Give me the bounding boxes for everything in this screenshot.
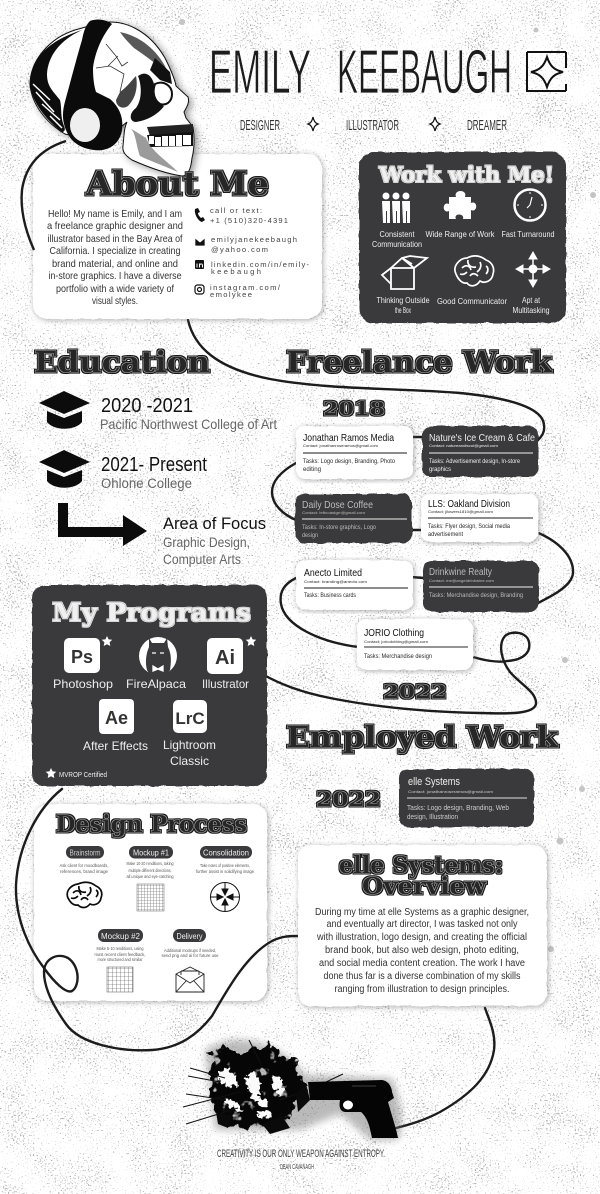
icon labels: Thinking Outside [376, 296, 430, 305]
program labels: Illustrator [202, 677, 249, 691]
icon labels: Apt at [522, 296, 541, 305]
icon: people [382, 192, 410, 223]
card: Nature's Ice Cream & Cafe: Tasks: Advertisement design, In-store [429, 458, 520, 465]
step: mockup 2: Mockup #2 [101, 931, 140, 941]
icon labels: Consistent [380, 230, 415, 239]
icon: FireAlpaca [139, 637, 177, 675]
icon: title diamond box [527, 52, 566, 91]
text block: about me bio: Hello! My name is Emily, and I am [48, 209, 182, 220]
text block: about me bio [47, 209, 183, 307]
card: Daily Dose Coffee: design [302, 532, 318, 539]
icon labels: Fast Turnaround [502, 230, 554, 239]
icon labels: Wide Range of Work [426, 230, 495, 239]
card: Drinkwine Realty: Tasks: Merchandise design, Branding [429, 592, 523, 599]
card: elle Systems [399, 769, 534, 827]
year 2022 employed: 2022 [316, 787, 381, 811]
area of focus [163, 514, 266, 567]
step: brainstorm: Brainstorm [70, 848, 100, 858]
education entry 1 [100, 395, 277, 432]
card: Nature's Ice Cream & Cafe [422, 426, 538, 477]
connector line: headphones to card [22, 141, 66, 250]
icon: Illustrator: Ai [215, 647, 235, 669]
step: mockup 2: Make 5-10 renditions, using [96, 946, 144, 951]
title: Emily Keebaugh: EMILY [209, 38, 311, 107]
heading: Work with Me: Work with Me! [378, 162, 554, 187]
education entry 2: 2021- Present [101, 454, 207, 476]
panel: elle systems overview [298, 845, 547, 1006]
panel: work with me [359, 152, 566, 323]
card: Drinkwine Realty [423, 561, 539, 612]
card: JORIO Clothing: Tasks: Merchandise design [364, 653, 432, 660]
step: consolidation: Take notes of positive elements, [200, 863, 250, 868]
text block: overview body: and social media content creation. The work I have [319, 958, 525, 969]
contact details: emilyjanekeebaugh [211, 235, 297, 244]
text block: overview body: During my time at elle Systems as a graphic designer, [315, 907, 529, 918]
illustration: gun with splatter [183, 1040, 401, 1140]
text block: about me bio: illustrator based in the Bay Area of [48, 234, 183, 245]
legend: MVROP certified [46, 768, 107, 779]
design process contents [56, 811, 254, 992]
icon: star [102, 636, 112, 646]
step: brainstorm: Ask client for moodboards, [60, 863, 108, 868]
year 2022: 2022 [383, 681, 447, 703]
card: Jonathan Ramos Media: Tasks: Logo design, Branding, Photo [303, 458, 395, 465]
step: delivery: Additional mockups if needed, [164, 948, 216, 953]
quote [217, 1148, 385, 1171]
card: Daily Dose Coffee: Daily Dose Coffee [302, 499, 373, 511]
card: LLS Oakland Division: LLS: Oakland Division [428, 498, 510, 510]
icon: sparkle [430, 117, 440, 131]
icon: After Effects: Ae [105, 708, 128, 728]
card: Jonathan Ramos Media: editing [303, 466, 321, 473]
contact details: instagram.com/ [210, 283, 281, 292]
step: mockup 2: most recent client feedback, [94, 952, 146, 957]
illustration: skull with headphones [30, 20, 197, 178]
step: mockup 1: all unique and eye-catching [126, 874, 174, 879]
heading: elle Systems Overview: elle Systems: [339, 852, 503, 879]
card: Drinkwine Realty: Drinkwine Realty [429, 566, 493, 578]
step: mockup 1: Make 10-20 renditions, taking [126, 861, 174, 866]
step: mockup 2: more structured and similar [98, 957, 143, 962]
employed work heading: Employed Work [286, 720, 559, 754]
card: Nature's Ice Cream & Cafe: graphics [429, 466, 452, 473]
heading: elle Systems Overview: Overview [362, 873, 487, 900]
contact details: linkedin.com/in/emily- [211, 260, 309, 269]
connector line: upper, behind cards [188, 320, 573, 713]
contact details [195, 206, 309, 299]
icon: instagram [195, 285, 204, 294]
program labels: FireAlpaca [126, 677, 186, 691]
step: consolidation [196, 846, 254, 912]
card: Jonathan Ramos Media: Jonathan Ramos Media [303, 432, 394, 444]
step: delivery: Delivery [176, 931, 203, 941]
card: LLS Oakland Division [421, 494, 538, 542]
program labels: Photoshop [53, 677, 113, 691]
text block: about me bio: portfolio with a wide variety of [56, 284, 174, 295]
icon labels: the Box [395, 306, 411, 315]
contact details: emolykee [210, 290, 252, 299]
panel: about me card [33, 154, 322, 319]
card: Anecto Limited: Contact: branding@anecto.com [304, 580, 367, 584]
panel: my programs [32, 585, 267, 786]
icon labels [372, 230, 554, 315]
card: Drinkwine Realty: Contact: me@angeldrinkwine.com [429, 579, 494, 583]
step: brainstorm: references, brand image [60, 869, 108, 874]
card: LLS Oakland Division: Tasks: Flyer design, Social media [428, 523, 510, 530]
card: JORIO Clothing: JORIO Clothing [364, 627, 424, 639]
icon: linkedin [195, 260, 204, 269]
icon: brain [455, 256, 494, 286]
program labels: After Effects [83, 739, 148, 753]
card: Daily Dose Coffee: Tasks: In-store graphics, Logo [302, 524, 376, 531]
icon: email [195, 238, 205, 246]
panel: design process [34, 804, 267, 1001]
step: consolidation: further assist in solidifying image [196, 869, 254, 874]
icon: sparkle [308, 117, 318, 131]
heading: My Programs: My Programs [52, 598, 251, 627]
icon: graduation cap 1 [39, 391, 90, 429]
icon labels: Multitasking [512, 306, 550, 315]
icon: brain [67, 882, 102, 908]
text block: about me bio: in-store graphics. I have a diverse [48, 271, 182, 282]
tagline: designer illustrator dreamer [240, 117, 507, 134]
contact details: @yahoo.com [211, 245, 268, 254]
text block: overview body: done thus far is a diverse combination of my skills [324, 971, 520, 982]
icon: Photoshop: Ps [71, 647, 93, 667]
icon: envelope [176, 967, 204, 992]
card: JORIO Clothing: Contact: joriodothing@gmail.com [364, 640, 428, 644]
card: Daily Dose Coffee: Contact: leftcoastgrr@gmail.com [302, 511, 365, 515]
text block: overview body [315, 907, 529, 995]
program labels [53, 677, 249, 768]
card: Nature's Ice Cream & Cafe: Contact: natureandiscol@gmail.com [429, 444, 498, 448]
step: delivery [162, 929, 219, 992]
card: Jonathan Ramos Media: Contact: jonathanroseramos@gmail.com [303, 444, 378, 448]
icon: Lightroom Classic: LrC [175, 709, 205, 728]
icon: dense grid [137, 884, 164, 911]
heading: elle Systems Overview [339, 852, 503, 900]
heading: Education: Education [34, 345, 210, 379]
icon: puzzle piece [444, 191, 476, 219]
icon labels: Good Communicator [437, 297, 507, 306]
card: Anecto Limited: Anecto Limited [304, 567, 362, 579]
icon: multidirectional arrows [516, 252, 550, 287]
heading: Freelance Work: Freelance Work [286, 345, 553, 379]
card: elle Systems: Contact: jonathanroseramos@gmail.com [408, 789, 494, 794]
step: brainstorm [60, 846, 108, 908]
heading: Design Process: Design Process [56, 811, 247, 838]
text block: about me bio: brand material, and online and [52, 259, 178, 270]
card: elle Systems: Tasks: Logo design, Branding, Web [407, 803, 509, 812]
title: Emily Keebaugh [209, 38, 566, 107]
card: Anecto Limited [296, 560, 413, 610]
card: elle Systems: elle Systems [408, 776, 460, 788]
card: elle Systems: design, Illustration [407, 812, 458, 821]
quote: CREATIVITY IS OUR ONLY WEAPON AGAINST ENTROPY. [217, 1148, 385, 1160]
text block: overview body: brand book, but also web design, photo editing, [325, 945, 519, 956]
icon: phone [195, 208, 205, 222]
icon: After Effects [99, 699, 134, 734]
icon: star [246, 636, 256, 646]
card: JORIO Clothing [357, 619, 473, 670]
card: Daily Dose Coffee [295, 494, 412, 543]
step: delivery: send png and ai for future use [162, 953, 219, 958]
heading: About Me: About Me [85, 164, 269, 203]
text block: about me bio: visual styles. [92, 296, 138, 307]
text block: about me bio: California. I specialize in creating [50, 246, 181, 257]
icon: clock [514, 190, 546, 220]
step: consolidation: Consolidation [203, 848, 249, 858]
tagline: designer illustrator dreamer: DREAMER [467, 117, 507, 134]
education entry 1: 2020 -2021 [101, 395, 193, 417]
card: Anecto Limited: Tasks: Business cards [304, 592, 356, 599]
education entry 2: Ohlone College [101, 475, 192, 491]
card: Nature's Ice Cream & Cafe: Nature's Ice Cream & Cafe [429, 432, 535, 444]
quote: DEAN CAVANAGH [280, 1164, 314, 1171]
education entry 1: Pacific Northwest College of Art [100, 416, 277, 432]
legend: MVROP certified: MVROP Certified [59, 772, 107, 779]
arrow: to area of focus [58, 503, 147, 546]
area of focus: Graphic Design, [163, 534, 250, 550]
text block: overview body: and eventually art director, I was tasked not only [326, 919, 518, 930]
step: mockup 1 [126, 846, 174, 911]
program labels: Classic [170, 754, 209, 768]
card: LLS Oakland Division: advertisement [428, 531, 463, 538]
step: mockup 2 [94, 929, 146, 992]
step: mockup 1: Mockup #1 [133, 848, 169, 858]
icon: Lightroom Classic [173, 700, 207, 733]
step: mockup 1: multiple different directions, [128, 868, 172, 873]
text block: about me bio: a freelance graphic designer and [47, 221, 183, 232]
card: LLS Oakland Division: Contact: jllowers1810@gmail.com [428, 510, 493, 514]
icon: open grid [107, 967, 133, 992]
icon: Photoshop [64, 638, 100, 673]
contact details: +1 (510)320-4391 [210, 216, 288, 225]
tagline: designer illustrator dreamer: DESIGNER [240, 117, 280, 134]
card: Jonathan Ramos Media [296, 426, 413, 479]
icon: Illustrator [207, 638, 243, 674]
connector line: over design process [16, 789, 494, 1128]
contact details: keebaugh [211, 267, 261, 276]
icon: converging arrows [210, 882, 240, 912]
icon labels: Communication [372, 240, 422, 249]
program labels: Lightroom [163, 738, 216, 752]
icon: graduation cap 2 [39, 450, 90, 488]
text block: overview body: ranging from illustration to design principles. [334, 984, 510, 995]
year 2018: 2018 [323, 398, 385, 420]
tagline: designer illustrator dreamer: ILLUSTRATOR [346, 117, 399, 134]
contact details: call or text: [210, 206, 262, 215]
icon: open box [382, 256, 427, 289]
text block: overview body: with illustration, logo design, and creating the official [316, 932, 527, 943]
area of focus: Computer Arts [163, 551, 241, 567]
education entry 2 [101, 454, 207, 491]
area of focus: Area of Focus [163, 514, 266, 533]
